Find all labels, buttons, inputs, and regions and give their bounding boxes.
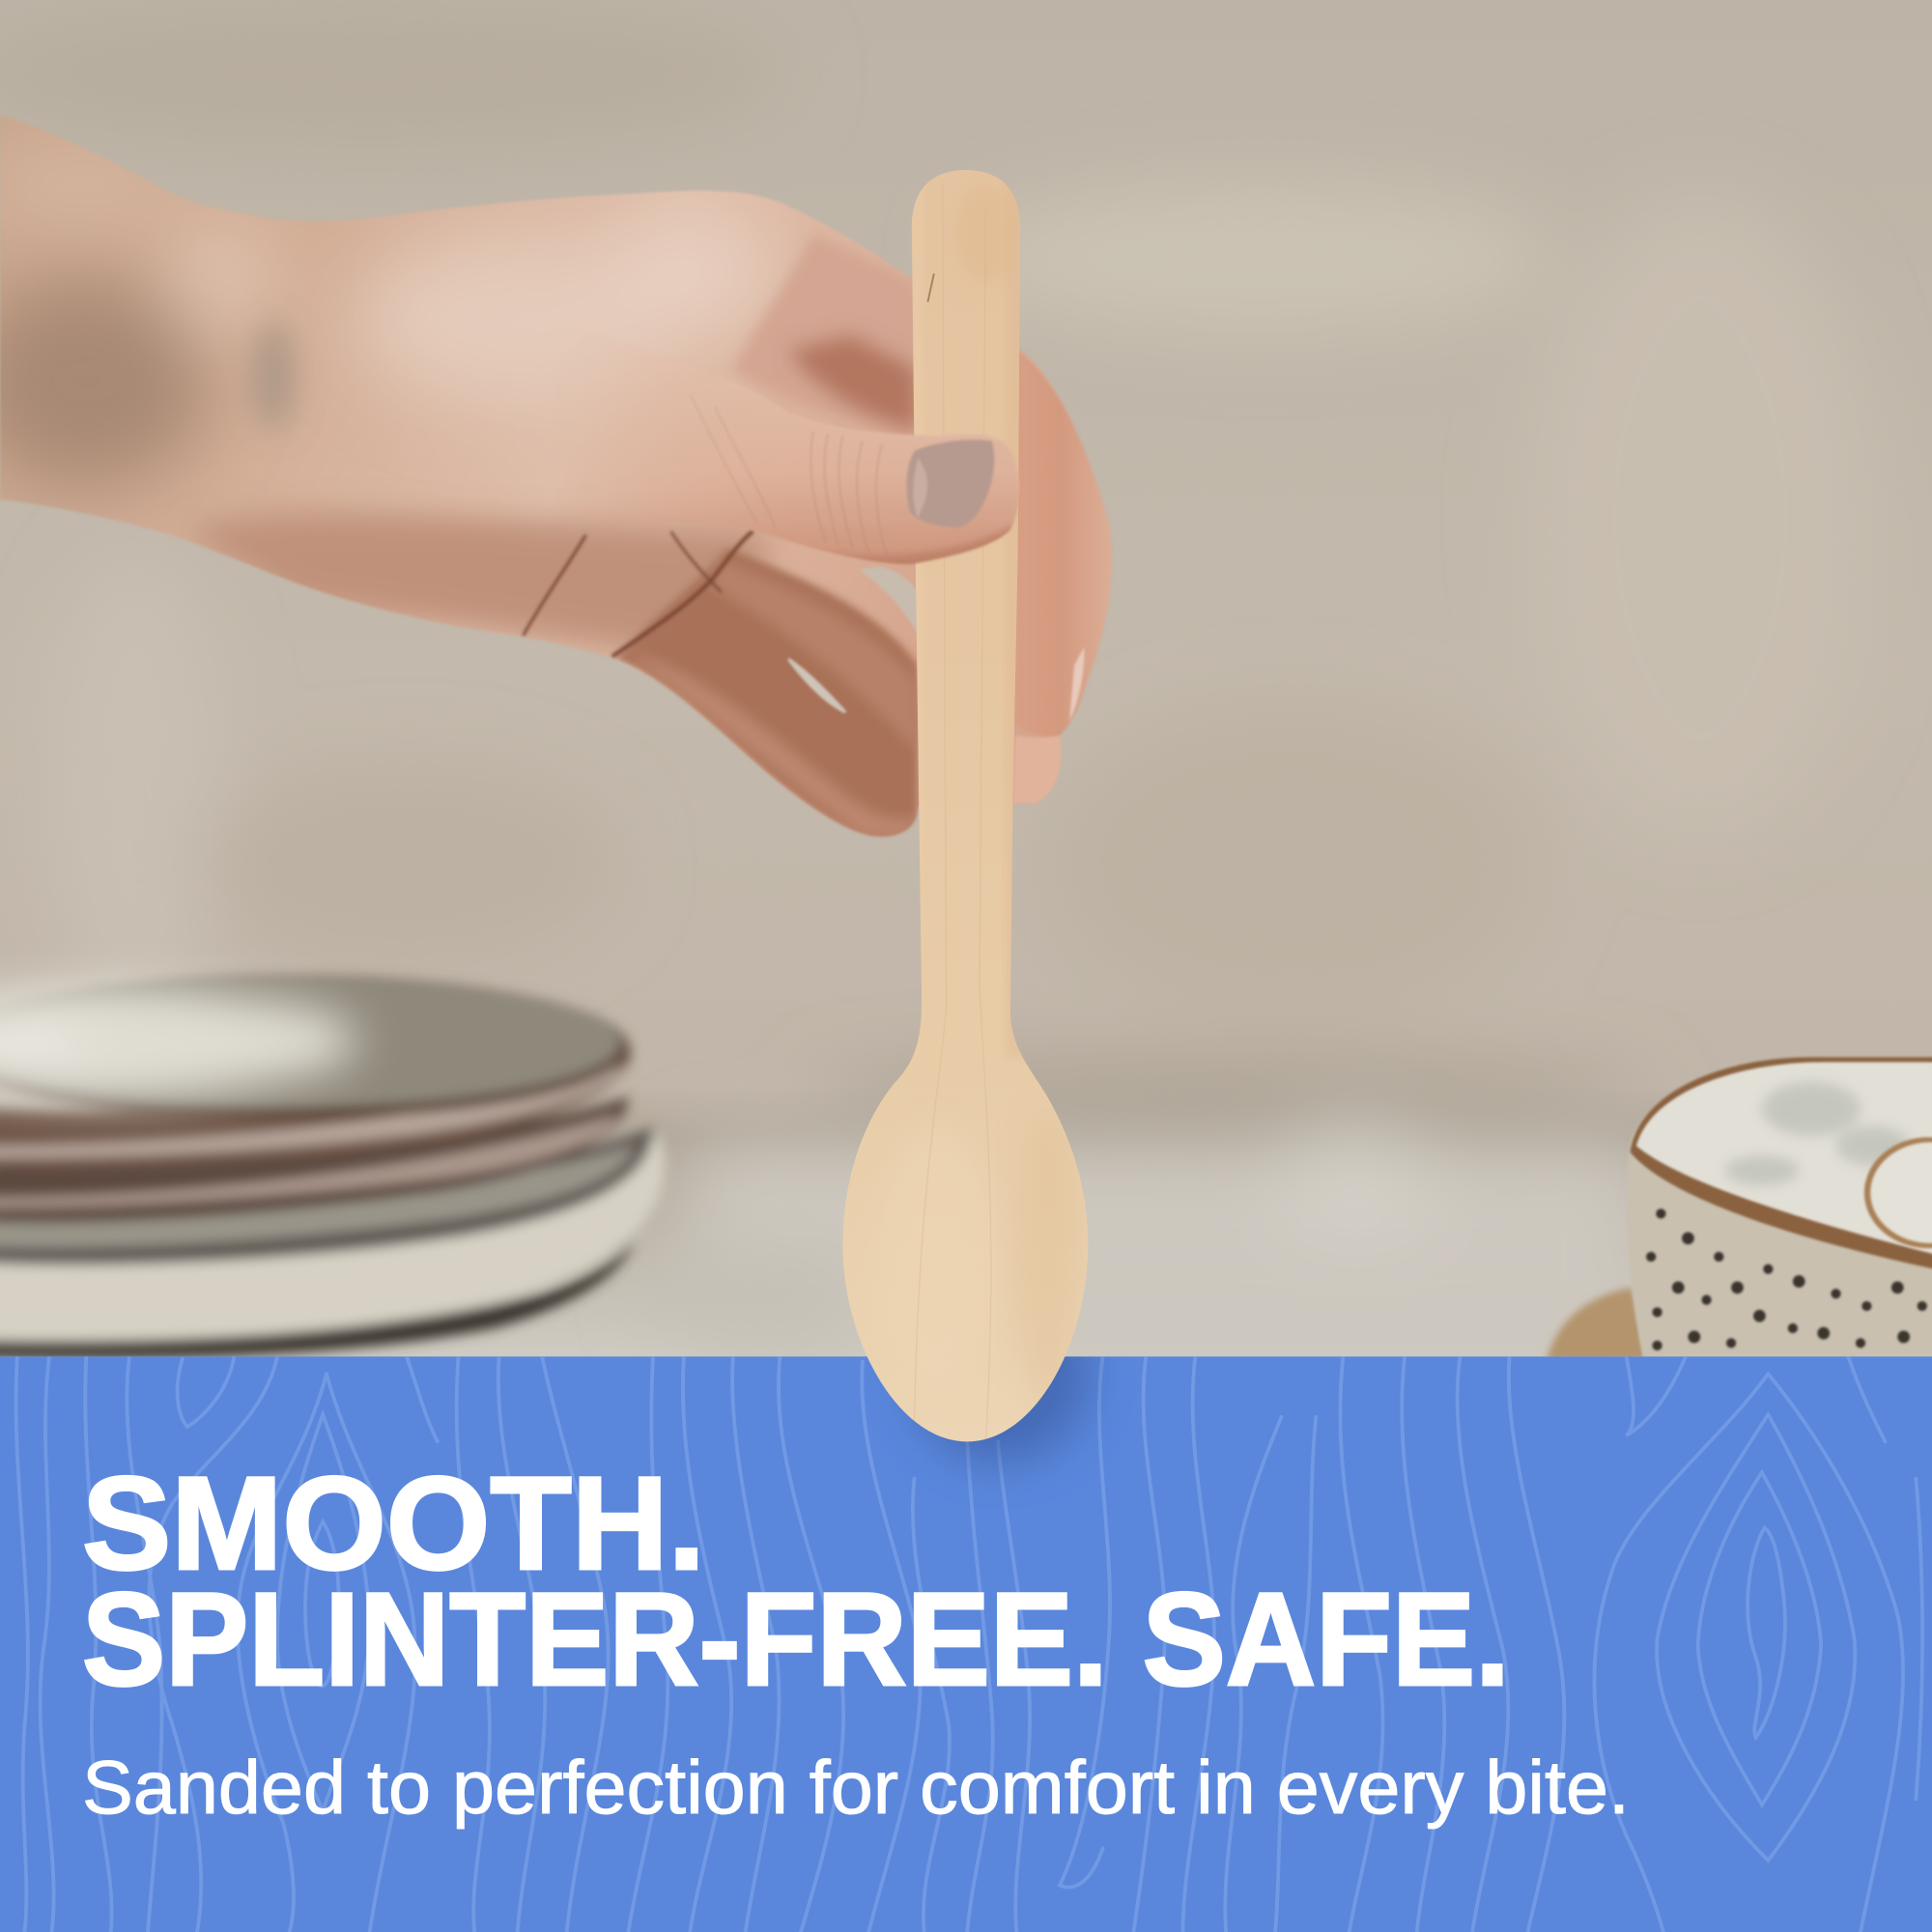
heading: SMOOTH. bbox=[82, 1450, 705, 1598]
gaps between fingers bbox=[859, 567, 918, 635]
palm creases bbox=[524, 532, 752, 656]
speckled bowl bbox=[1547, 1057, 1932, 1368]
background photo: blurred kitchen wall and table bbox=[0, 0, 1932, 1368]
wooden spoon bbox=[842, 170, 1088, 1441]
subheading: Sanded to perfection for comfort in every bite. bbox=[82, 1745, 1630, 1830]
heading: SPLINTER-FREE. SAFE. bbox=[82, 1566, 1510, 1714]
plates stack bbox=[0, 976, 665, 1358]
thumb in front of the spoon bbox=[665, 428, 1019, 566]
thumb nail bbox=[906, 440, 994, 527]
spoon shadow on band bbox=[903, 1356, 1105, 1479]
wood grain pattern bbox=[16, 1356, 1922, 1932]
fingers below the thumb bbox=[616, 549, 918, 838]
panel: blue caption band bbox=[0, 1356, 1932, 1932]
right finger bbox=[1018, 354, 1111, 736]
heading bbox=[82, 1450, 1510, 1714]
index finger web shadow bbox=[735, 238, 912, 412]
hand holding the spoon bbox=[0, 115, 1112, 838]
